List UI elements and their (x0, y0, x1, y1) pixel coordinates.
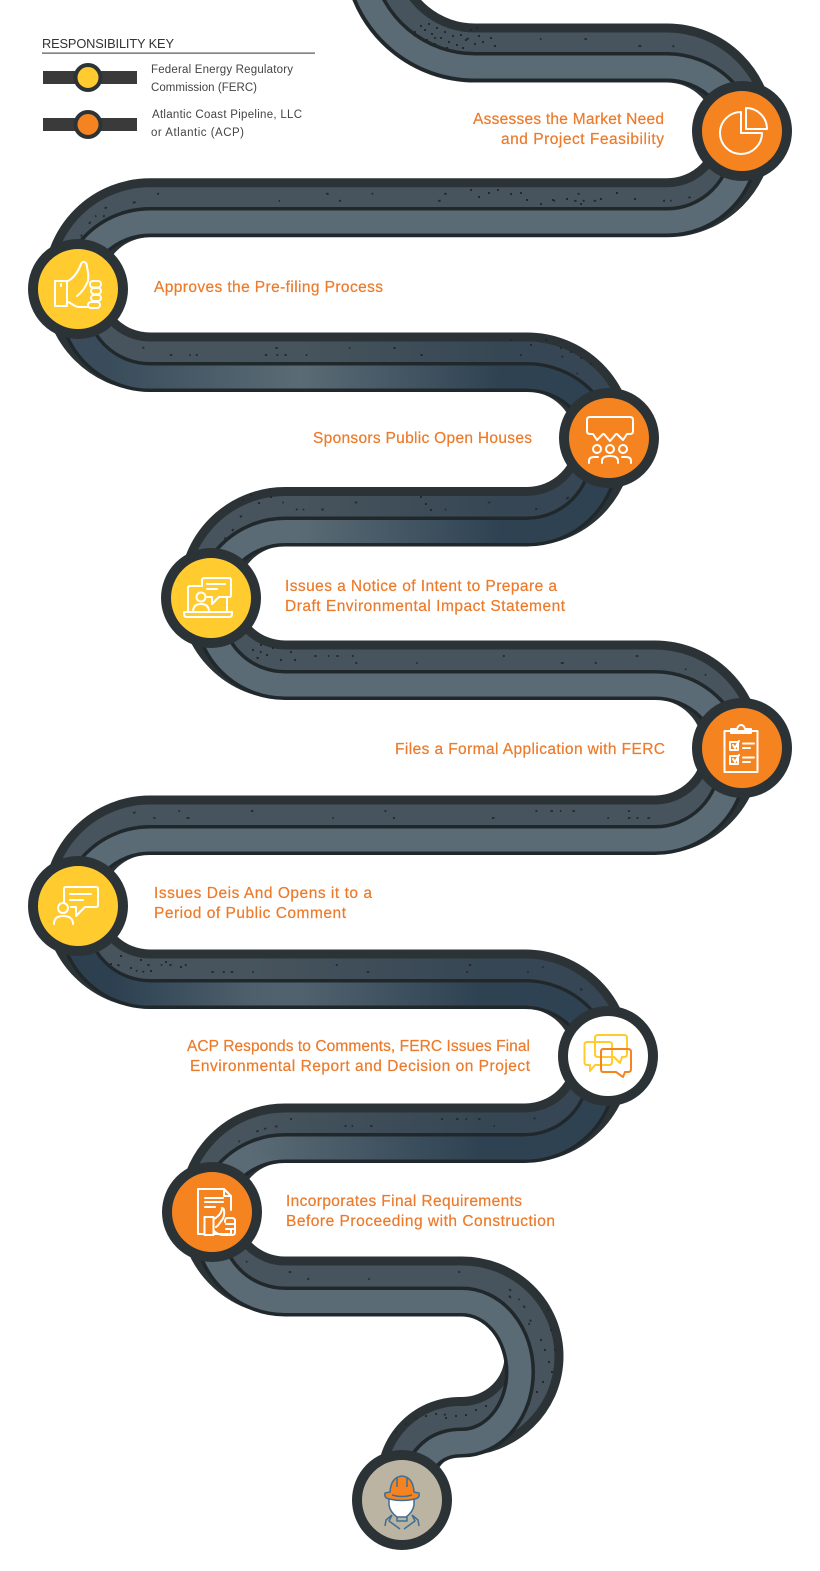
speckle clusters (110, 24, 636, 1432)
ACP label (151, 109, 302, 139)
FERC label: Commission (FERC) (151, 82, 257, 94)
step 8 text: Incorporates Final Requirements (286, 1193, 522, 1210)
key entry: FERC (43, 64, 293, 94)
step 6 text: Issues Deis And Opens it to a (154, 885, 372, 902)
step 1 text (473, 111, 664, 148)
step 5 text: Files a Formal Application with FERC (395, 741, 665, 758)
step 6 text (154, 885, 372, 922)
lower band outline (72, 0, 744, 1482)
step 1 text: Assesses the Market Need (473, 111, 664, 128)
step 5 node: clipboard icon (697, 703, 787, 793)
step 2 node: thumbs up icon (33, 244, 123, 334)
step 3 text: Sponsors Public Open Houses (313, 430, 532, 447)
upper band shading, run seven (250, 979, 602, 1133)
FERC label: Federal Energy Regulatory (151, 64, 293, 76)
step 8 text (286, 1193, 555, 1230)
step 7 node: speech bubbles icon (563, 1011, 653, 1101)
step 2 text: Approves the Pre-filing Process (154, 279, 383, 296)
ACP label: Atlantic Coast Pipeline, LLC (152, 109, 302, 121)
final node: construction worker icon (357, 1455, 447, 1545)
FERC swatch (43, 65, 137, 90)
pipe speckle texture (73, 0, 744, 1475)
step 1 text: and Project Feasibility (501, 131, 664, 148)
upper pipe band (73, 0, 744, 1500)
lower band shading: right of run seven (250, 994, 602, 1148)
step 7 text (187, 1038, 531, 1075)
pipeline (72, 0, 744, 1500)
key rule (42, 53, 315, 54)
step 8 text: Before Proceeding with Construction (286, 1213, 555, 1230)
speckle row one (73, 0, 744, 1475)
step 4 text: Draft Environmental Impact Statement (285, 598, 566, 615)
ACP swatch (43, 112, 137, 137)
key entry: ACP (43, 109, 302, 139)
lower band shading: left of run three (72, 300, 300, 377)
step 6 node: person speaking icon (33, 861, 123, 951)
step 8 node: approved document icon (167, 1167, 257, 1257)
upper band shading, run three (300, 362, 604, 516)
step 7 text: ACP Responds to Comments, FERC Issues Final (187, 1038, 530, 1055)
pipe silhouette (73, 0, 744, 1500)
key heading: RESPONSIBILITY KEY (42, 36, 174, 51)
step 4 text (285, 578, 566, 615)
step 3 node: audience icon (564, 393, 654, 483)
step 1 node: pie chart icon (697, 86, 787, 176)
step 4 node: laptop chat icon (166, 553, 256, 643)
lower band shading: left of run seven (73, 917, 300, 994)
step 6 text: Period of Public Comment (154, 905, 347, 922)
FERC label (151, 64, 293, 94)
responsibility key (42, 36, 315, 139)
lower band (72, 0, 744, 1482)
step 7 text: Environmental Report and Decision on Project (190, 1058, 531, 1075)
ACP label: or Atlantic (ACP) (151, 127, 244, 139)
step 4 text: Issues a Notice of Intent to Prepare a (285, 578, 557, 595)
speckle row two (73, 0, 744, 1468)
lower band shading: right of run three (300, 377, 604, 532)
